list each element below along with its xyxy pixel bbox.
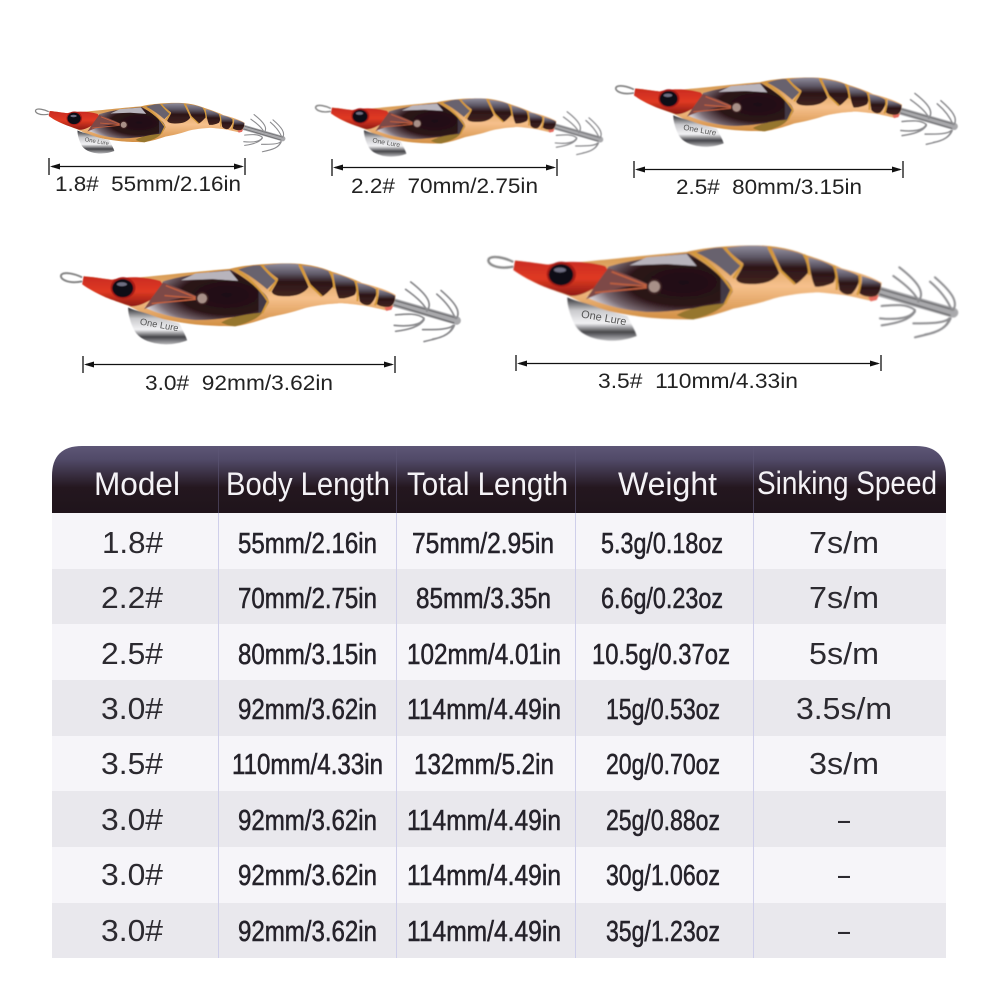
size label: 2.2#: 2.2# 70mm/2.75in (351, 175, 538, 198)
size label: 1.8#: 1.8# 55mm/2.16in (55, 173, 241, 196)
row: 3.0# 30g: 92mm/3.62in (238, 860, 377, 892)
row: 3.5#: 3.5# (101, 746, 164, 781)
row: 2.2#: 70mm/2.75in (238, 583, 377, 615)
row: 3.0# 35g: 35g/1.23oz (606, 916, 720, 948)
lure photo: 2.2#: One Lure (372, 137, 401, 149)
row: 2.5#: 102mm/4.01in (407, 639, 561, 671)
row: 1.8#: 5.3g/0.18oz (601, 528, 723, 560)
dimension arrow: 3.0# (83, 356, 395, 373)
lure photo: 3.5# (488, 245, 955, 341)
row: 3.0# 25g: – (838, 802, 851, 837)
lure photo: 2.5#: One Lure (683, 123, 718, 138)
row: 1.8# (102, 525, 879, 560)
row: 3.0# 25g: 92mm/3.62in (238, 805, 377, 837)
lure photo: 2.5# (616, 77, 955, 147)
row: 2.5#: 10.5g/0.37oz (592, 639, 730, 671)
row: 3.0#: 3.0# (101, 691, 164, 726)
table header labels: Weight (618, 466, 717, 502)
table header band (52, 446, 946, 513)
row: 3.5#: 3s/m (809, 746, 879, 781)
row: 3.0#: 92mm/3.62in (238, 694, 377, 726)
row: 1.8#: 1.8# (102, 525, 164, 560)
dimension arrow: 2.5# (634, 161, 903, 178)
row: 2.2#: 7s/m (809, 580, 879, 615)
lure photo: 1.8# (35, 103, 284, 154)
row: 2.5#: 2.5# (101, 636, 164, 671)
row: 3.0# 30g: – (838, 857, 851, 892)
row: 3.0# 35g: 92mm/3.62in (238, 916, 377, 948)
row: 3.5#: 132mm/5.2in (414, 749, 554, 781)
row: 3.5#: 110mm/4.33in (232, 749, 383, 781)
row: 3.0#: 114mm/4.49in (407, 694, 561, 726)
lure photo: 2.2# (316, 98, 601, 157)
row: 2.5#: 80mm/3.15in (238, 639, 377, 671)
row: 3.0# 30g: 3.0# (101, 857, 164, 892)
row: 3.0# 35g: – (838, 913, 851, 948)
row: 2.5# (101, 636, 879, 671)
row: 3.5# (101, 746, 879, 781)
row: 3.0# 25g: 3.0# (101, 802, 164, 837)
size label: 3.5#: 3.5# 110mm/4.33in (598, 370, 798, 393)
row: 3.0# 30g: 114mm/4.49in (407, 860, 561, 892)
dimension arrow: 2.2# (332, 159, 557, 176)
table row backgrounds (52, 513, 946, 958)
row: 3.0# (101, 691, 892, 726)
row: 3.0# 25g (101, 802, 851, 837)
size label: 2.5#: 2.5# 80mm/3.15in (676, 176, 862, 199)
lure photo: 3.0# (61, 263, 458, 344)
table header labels: Body Length (226, 466, 390, 502)
row: 3.0# 25g: 25g/0.88oz (606, 805, 720, 837)
lure photo: 3.5#: One Lure (580, 308, 627, 328)
table header labels: Sinking Speed (757, 465, 937, 501)
dimension arrow: 1.8# (49, 158, 245, 175)
row: 1.8#: 75mm/2.95in (412, 528, 554, 560)
row: 2.2#: 6.6g/0.23oz (601, 583, 723, 615)
row: 3.5#: 20g/0.70oz (606, 749, 720, 781)
row: 3.0#: 3.5s/m (796, 691, 892, 726)
size label: 3.0#: 3.0# 92mm/3.62in (145, 372, 333, 395)
row: 3.0# 35g: 3.0# (101, 913, 164, 948)
row: 3.0# 35g: 114mm/4.49in (407, 916, 561, 948)
row: 2.2#: 85mm/3.35n (416, 583, 551, 615)
row: 2.2#: 2.2# (101, 580, 164, 615)
row: 1.8#: 7s/m (809, 525, 879, 560)
table header labels: Total Length (407, 466, 568, 502)
row: 3.0# 35g (101, 913, 851, 948)
row: 2.5#: 5s/m (809, 636, 879, 671)
row: 3.0# 30g (101, 857, 851, 892)
row: 1.8#: 55mm/2.16in (238, 528, 377, 560)
row: 3.0# 30g: 30g/1.06oz (606, 860, 720, 892)
dimension arrow: 3.5# (516, 355, 881, 371)
lure photo: 3.0#: One Lure (139, 317, 179, 333)
table header labels: Model (94, 466, 180, 502)
table header labels (94, 465, 937, 502)
row: 3.0# 25g: 114mm/4.49in (407, 805, 561, 837)
row: 3.0#: 15g/0.53oz (606, 694, 720, 726)
row: 2.2# (101, 580, 879, 615)
specification table (52, 446, 946, 958)
lure photo: 1.8#: One Lure (84, 137, 109, 147)
